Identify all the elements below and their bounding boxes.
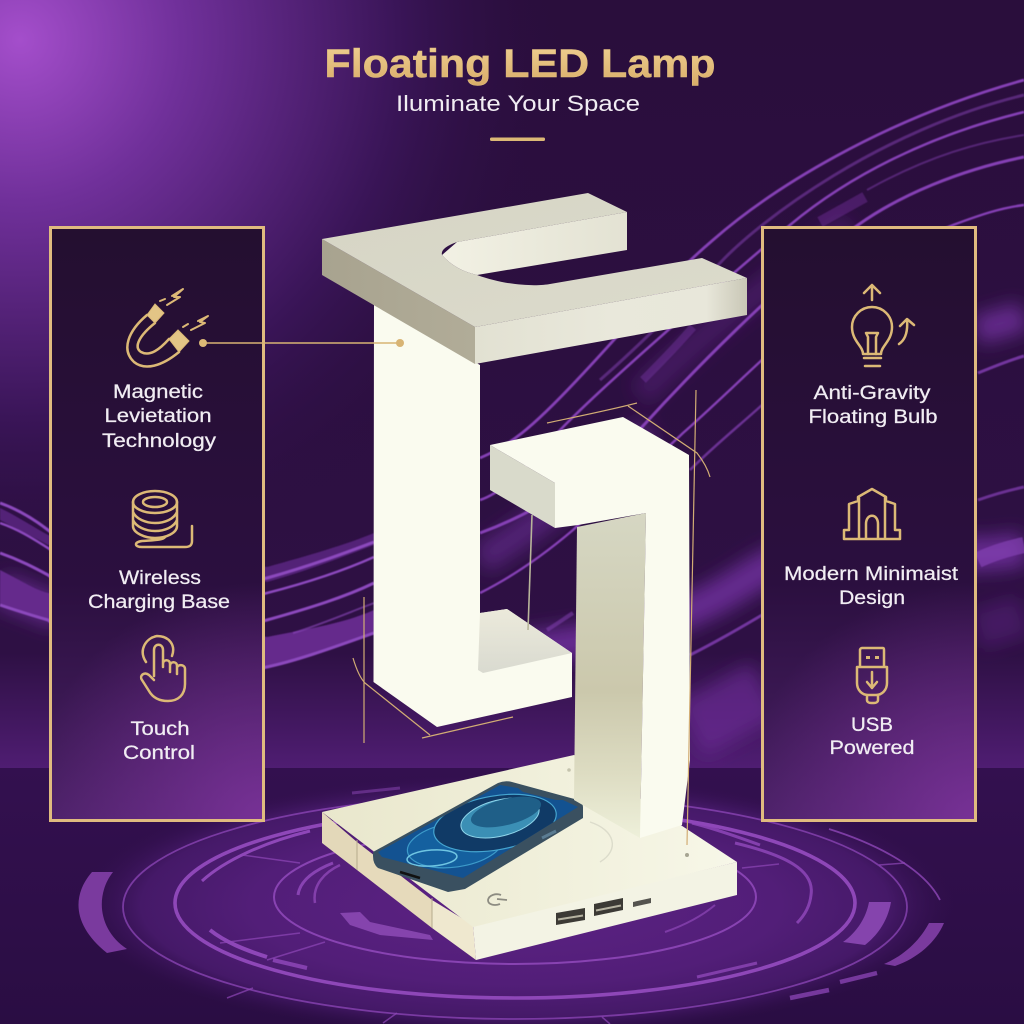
label: usb powered: USB: [851, 715, 893, 736]
label: modern design: [784, 564, 959, 609]
lamp: phone: [373, 781, 583, 892]
icon: usb plug: [857, 648, 887, 703]
label: usb powered: Powered: [830, 738, 914, 759]
background swirl: sweeping lines to top right: [480, 80, 1024, 655]
background wall: [0, 0, 1024, 768]
label: wireless charging: [88, 568, 230, 613]
lamp: left column: [374, 305, 572, 727]
label: touch control: Touch: [130, 719, 190, 740]
label: wireless charging: Wireless: [119, 568, 201, 589]
title: Floating LED Lamp: [324, 42, 716, 86]
label: anti-gravity bulb: Floating Bulb: [808, 407, 938, 428]
right feature panel: [762, 228, 976, 820]
background swirl: wide glow bands: [0, 225, 1024, 730]
label: usb powered: [830, 715, 914, 759]
background swirl: left waves: [0, 503, 374, 676]
label: magnetic levitation: [102, 382, 217, 452]
icon: magnet: [127, 289, 208, 367]
subtitle: Iluminate Your Space: [396, 91, 640, 116]
lamp: power button: [488, 894, 507, 905]
label: anti-gravity bulb: [808, 383, 938, 428]
lamp: gold accent arcs: [353, 390, 710, 845]
connector line: [199, 339, 404, 347]
label: modern design: Modern Minimaist: [784, 564, 959, 585]
lamp: tether: [528, 515, 532, 630]
lamp: usb ports: [556, 898, 651, 925]
left feature panel: [50, 228, 264, 820]
label: magnetic levitation: Levietation: [104, 406, 212, 427]
label: magnetic levitation: Technology: [102, 431, 217, 452]
icon: floating bulb: [852, 285, 914, 366]
icon: wireless coil: [133, 491, 192, 547]
lamp: top plate: [322, 193, 747, 364]
label: modern design: Design: [839, 588, 905, 609]
lamp: base: [322, 755, 737, 960]
icon: touch hand: [141, 636, 185, 701]
title divider: [490, 138, 545, 141]
label: magnetic levitation: Magnetic: [113, 382, 203, 403]
label: wireless charging: Charging Base: [88, 592, 230, 613]
label: anti-gravity bulb: Anti-Gravity: [814, 383, 931, 404]
floor rings and arc segments: [78, 788, 944, 1024]
label: touch control: [123, 719, 195, 764]
floor: [0, 768, 1024, 1024]
label: touch control: Control: [123, 743, 195, 764]
lamp illustration: [322, 193, 747, 960]
lamp: right arm and column: [490, 417, 690, 838]
icon: building: [844, 489, 900, 539]
